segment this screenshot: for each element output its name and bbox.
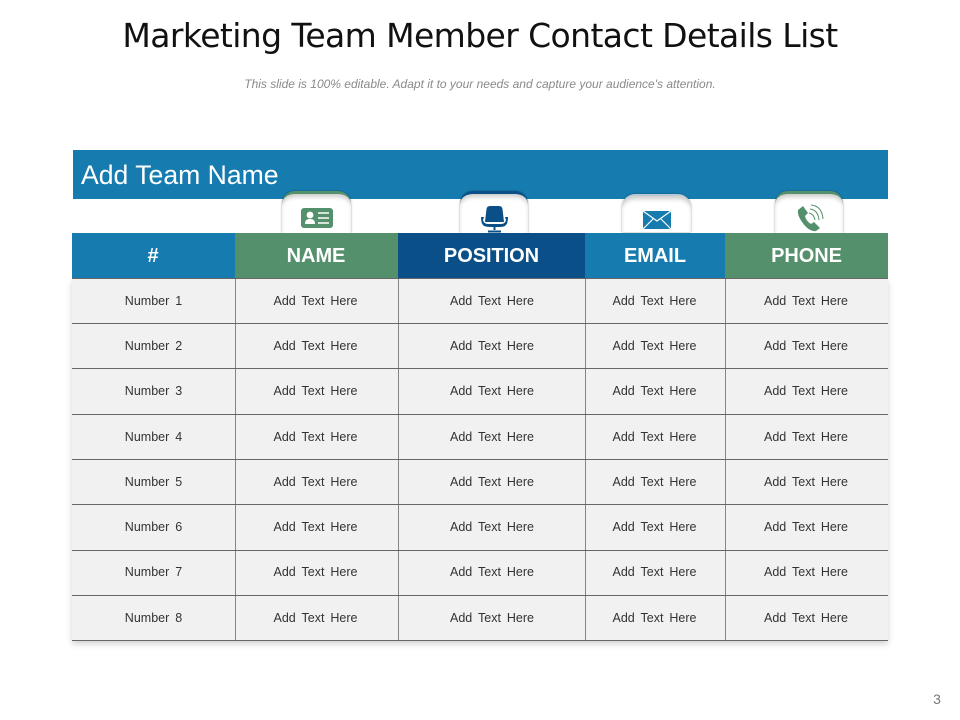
row 8 <box>125 611 848 625</box>
row 2: Add Text Here <box>612 339 696 353</box>
row 7: Add Text Here <box>612 565 696 579</box>
table body background <box>72 278 888 641</box>
row 3: Number 3 <box>125 384 182 398</box>
row 5: Add Text Here <box>450 475 534 489</box>
row 8: Add Text Here <box>612 611 696 625</box>
team name text: Add Team Name <box>81 160 279 190</box>
row 3: Add Text Here <box>274 384 357 398</box>
row 7 <box>125 565 848 579</box>
row 2: Add Text Here <box>450 339 534 353</box>
row 2 <box>125 339 848 353</box>
row 5: Number 5 <box>125 475 182 489</box>
header: position: POSITION <box>444 245 539 267</box>
row 8: Add Text Here <box>450 611 534 625</box>
header: name: NAME <box>287 245 345 267</box>
row 4: Add Text Here <box>274 430 357 444</box>
header: number <box>72 233 235 278</box>
row 1 <box>125 294 848 308</box>
row 1: Add Text Here <box>450 294 534 308</box>
row 3: Add Text Here <box>764 384 848 398</box>
row 4: Number 4 <box>125 430 182 444</box>
row 7: Number 7 <box>125 565 182 579</box>
row 1: Add Text Here <box>612 294 696 308</box>
row 4: Add Text Here <box>450 430 534 444</box>
row 3 <box>125 384 848 398</box>
row 2: Add Text Here <box>764 339 848 353</box>
row 6 <box>125 520 848 534</box>
header: email: EMAIL <box>624 245 686 267</box>
team name banner <box>73 150 888 199</box>
icon tab: name card <box>282 191 351 233</box>
row 4 <box>125 430 848 444</box>
header: phone <box>725 233 888 278</box>
subtitle: This slide is 100% editable. Adapt it to your needs and capture your audience's attention. <box>244 77 716 91</box>
row 4: Add Text Here <box>764 430 848 444</box>
row 6: Number 6 <box>125 520 182 534</box>
row 5: Add Text Here <box>274 475 357 489</box>
row 6: Add Text Here <box>764 520 848 534</box>
row 7: Add Text Here <box>764 565 848 579</box>
row 5 <box>125 475 848 489</box>
header: position <box>398 233 585 278</box>
row 6: Add Text Here <box>450 520 534 534</box>
row 6: Add Text Here <box>274 520 357 534</box>
header: number: # <box>147 245 159 267</box>
row 3: Add Text Here <box>450 384 534 398</box>
header: email <box>585 233 725 278</box>
row 2: Number 2 <box>125 339 182 353</box>
row 1: Add Text Here <box>274 294 357 308</box>
icon tab: phone <box>775 191 843 233</box>
icon tab: office chair <box>460 191 528 233</box>
row 8: Number 8 <box>125 611 182 625</box>
row 7: Add Text Here <box>450 565 534 579</box>
page number: 3 <box>933 691 941 707</box>
row 8: Add Text Here <box>274 611 357 625</box>
row 7: Add Text Here <box>274 565 357 579</box>
row 4: Add Text Here <box>612 430 696 444</box>
icon tab: envelope <box>622 194 691 232</box>
row 1: Add Text Here <box>764 294 848 308</box>
row 2: Add Text Here <box>274 339 357 353</box>
title: Marketing Team Member Contact Details List <box>122 16 838 55</box>
row 6: Add Text Here <box>612 520 696 534</box>
row 5: Add Text Here <box>612 475 696 489</box>
header: phone: PHONE <box>771 245 842 267</box>
row 8: Add Text Here <box>764 611 848 625</box>
row 3: Add Text Here <box>612 384 696 398</box>
header: name <box>235 233 398 278</box>
row 5: Add Text Here <box>764 475 848 489</box>
row 1: Number 1 <box>125 294 182 308</box>
